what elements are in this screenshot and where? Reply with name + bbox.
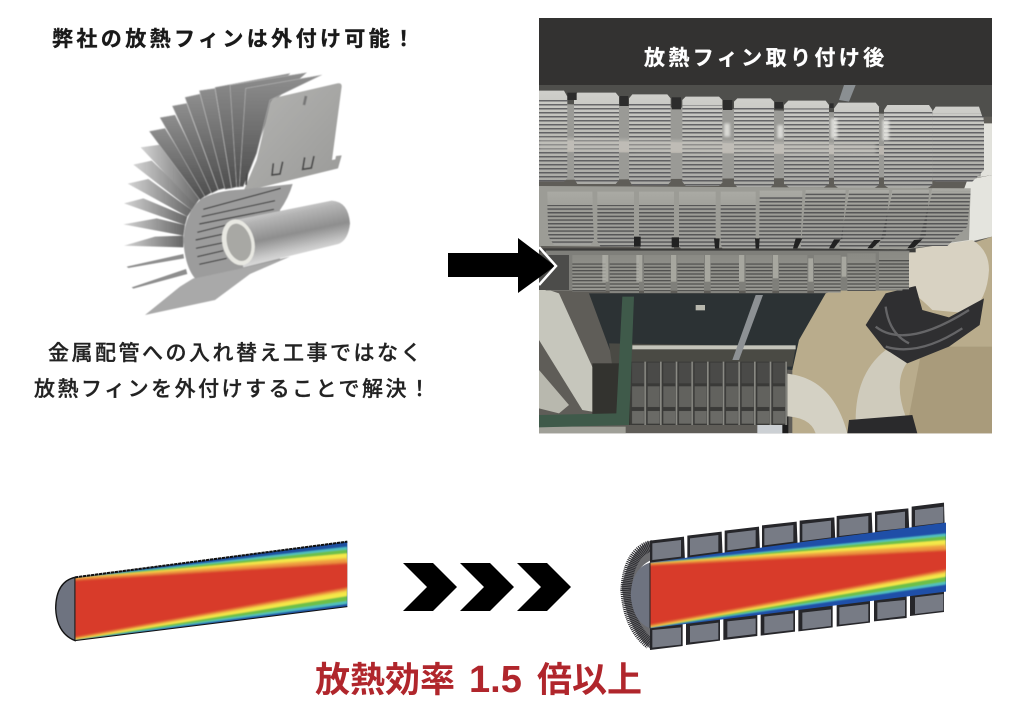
result text xyxy=(315,659,642,701)
chevron 3 xyxy=(517,563,571,611)
beige wall xyxy=(792,237,992,433)
right white pipes xyxy=(976,123,992,178)
chevron 1 xyxy=(403,563,457,611)
photo heading: 放熱フィン取り付け後 xyxy=(644,47,888,70)
bottom fin blocks xyxy=(652,594,943,648)
illustration: radiator fin on pipe xyxy=(123,73,350,315)
title: external fins possible: 弊社の放熱フィンは外付け可能！ xyxy=(52,28,418,51)
row 2 fins xyxy=(539,248,916,252)
end cap xyxy=(631,563,650,628)
bottom plate xyxy=(145,257,290,315)
top fin blocks xyxy=(652,507,943,560)
temperature bands xyxy=(650,523,946,628)
ceiling xyxy=(539,85,992,116)
end cap xyxy=(56,577,75,641)
front plate xyxy=(243,83,342,192)
curved fin base xyxy=(183,184,293,278)
arrows: chevrons xyxy=(403,563,571,611)
tube outline xyxy=(75,542,347,577)
line 2: 放熱フィンを外付けすることで解決！ xyxy=(34,378,432,401)
arrow tip outline xyxy=(539,247,556,285)
base slots xyxy=(196,188,281,264)
temperature bands xyxy=(75,542,347,641)
row 1 wash xyxy=(539,137,876,154)
top fin frames xyxy=(650,503,945,565)
dark coil fin xyxy=(866,286,984,363)
dark room xyxy=(589,293,826,370)
result text: 放熱効率 xyxy=(315,661,455,700)
arrow: to photo xyxy=(448,238,555,293)
white pipes left xyxy=(539,290,592,412)
lower left fins xyxy=(123,144,200,289)
fin fan at end xyxy=(626,546,650,644)
text: explanation xyxy=(34,342,432,401)
bottom fin frames xyxy=(650,590,944,650)
upper fins xyxy=(149,73,322,200)
pipe opening xyxy=(217,216,260,269)
result text: 倍以上 xyxy=(537,661,642,700)
chevron 2 xyxy=(460,563,514,611)
lower fin block xyxy=(592,363,631,425)
photo xyxy=(539,80,992,433)
lower curved pipe xyxy=(787,374,848,434)
plate slots xyxy=(246,96,314,185)
green beam xyxy=(539,297,634,427)
chart: tube without fins heat simulation xyxy=(56,542,360,641)
pipe body xyxy=(232,201,350,267)
result text: 1.5 xyxy=(469,659,522,701)
bottom dark fin xyxy=(847,415,917,433)
row 1 fins xyxy=(539,103,984,180)
line 1: 金属配管への入れ替え工事ではなく xyxy=(48,342,424,365)
panel: photo after fin installation xyxy=(539,18,992,433)
chart: tube with fins heat simulation xyxy=(622,503,957,650)
row 3 fins xyxy=(546,251,910,291)
photo heading bar xyxy=(539,18,992,85)
